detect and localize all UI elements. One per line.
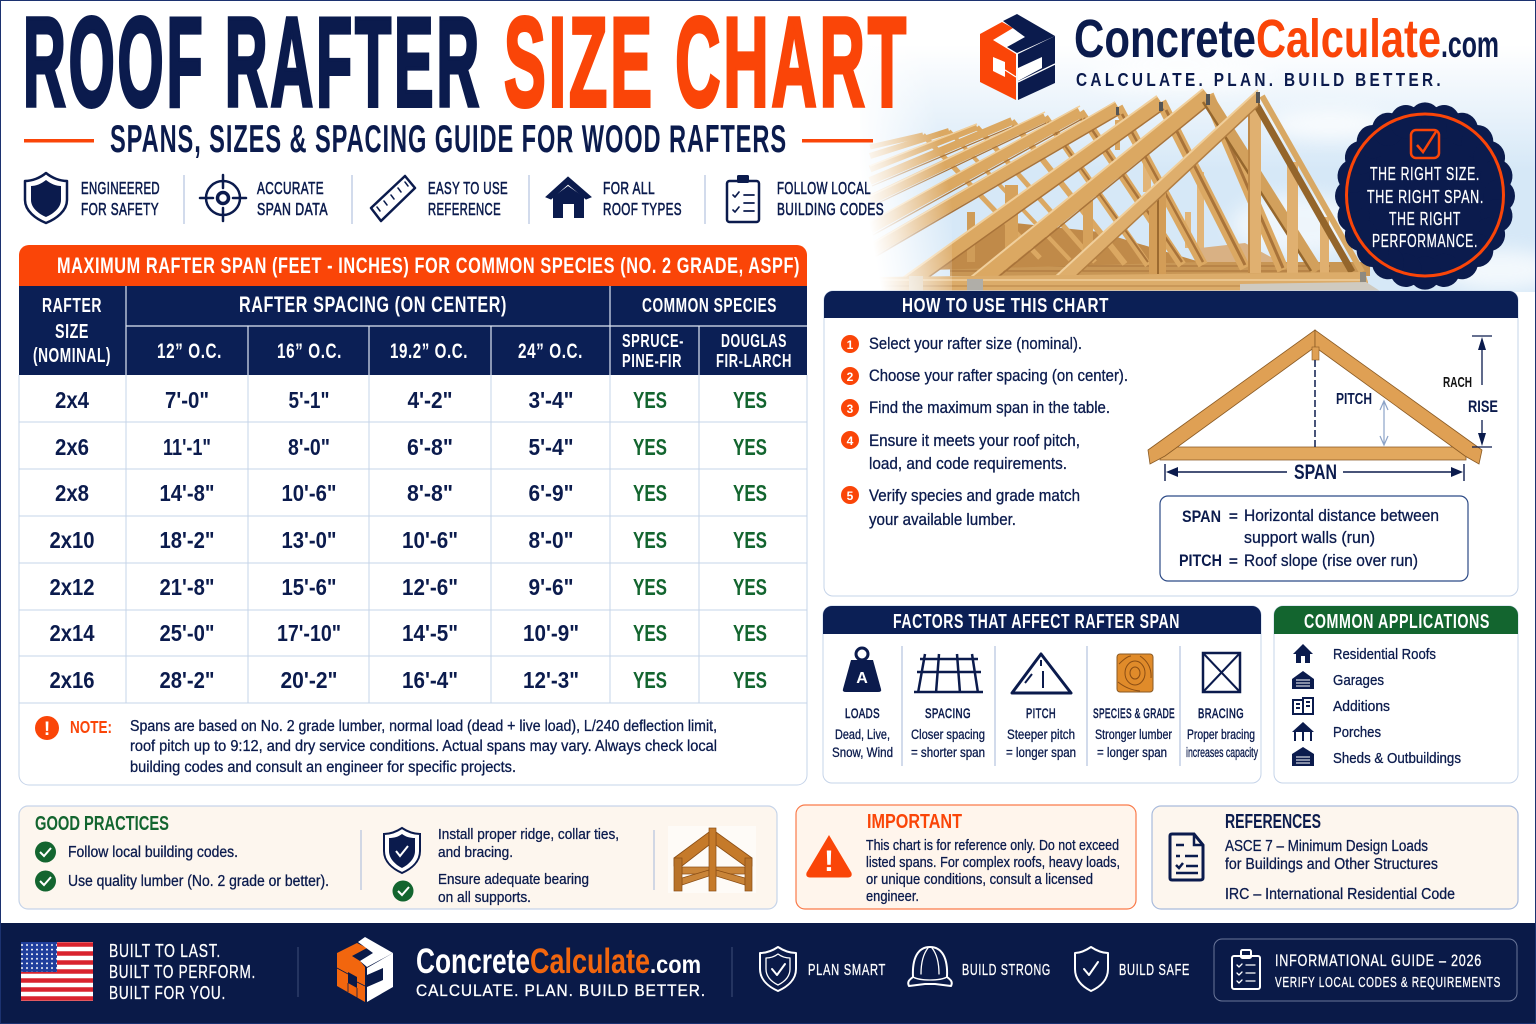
row 2x12: 15'-6" [282,574,336,600]
factor: pitch: Steeper pitch [1007,727,1075,742]
panel: factors that affect rafter span [823,606,1261,783]
build strong: BUILD STRONG [962,962,1051,979]
steps: 1 [847,338,854,352]
roof pitch diagram [1148,330,1498,484]
table header: 12” O.C. [157,340,222,363]
application: garages: Garages [1333,672,1384,689]
icon: US flag [21,942,93,1001]
roof pitch diagram: RACH [1443,374,1472,391]
steps: 4 [847,434,854,448]
panel: references: IRC – International Residential Code [1225,886,1455,903]
factor: bracing [1186,653,1258,760]
table header: 19.2” O.C. [390,340,468,363]
note: Spans are based on No. 2 grade lumber, normal load (dead + live load), L/240 deflection limit, [130,718,717,735]
application: sheds and outbuildings: Sheds & Outbuildings [1333,750,1461,767]
document icon [1170,834,1203,880]
row 2x12: 9'-6" [528,574,574,600]
application: additions [1293,698,1390,715]
feature: follow local building codes: BUILDING CODES [777,199,884,219]
footer logo: Calculate [530,942,650,981]
slogan: BUILT FOR YOU. [109,983,226,1003]
row 2x10: YES [733,527,767,553]
row 2x4: 2x4 [55,387,89,413]
application: porches: Porches [1333,724,1381,741]
row 2x12: 2x12 [50,574,94,600]
factor: pitch: PITCH [1026,705,1056,721]
row 2x4: YES [733,387,767,413]
feature: easy to use reference [371,176,508,221]
steps: 5 [847,489,854,503]
shield icon [384,828,420,873]
row 2x12 [50,574,767,600]
roof pitch diagram: RISE [1468,397,1498,416]
steps: Select your rafter size (nominal). [869,335,1082,353]
row 2x6: YES [633,434,667,460]
slogan: BUILT TO LAST. [109,941,221,961]
note: building codes and consult an engineer for specific projects. [130,759,516,776]
steps: Choose your rafter spacing (on center). [869,367,1128,385]
panel: good practices: GOOD PRACTICES [35,813,169,835]
table title bar [19,245,807,286]
badge: the right size: THE RIGHT SIZE. [1370,164,1480,184]
feature: accurate span data: ACCURATE [257,178,324,198]
steps: Ensure it meets your roof pitch, [869,432,1080,450]
note: NOTE: [70,717,112,737]
definitions box: support walls (run) [1244,529,1375,547]
table header [19,286,807,375]
panel: references: ASCE 7 – Minimum Design Loads [1225,838,1428,855]
factor: species and grade: Stronger lumber [1095,727,1172,742]
table header: SIZE [55,321,89,343]
feature: easy to use reference: REFERENCE [428,199,501,219]
roof pitch diagram: SPAN [1294,461,1337,484]
build safe: BUILD SAFE [1119,962,1190,979]
subtitle [24,118,873,161]
row 2x14: 25'-0" [160,620,214,646]
steps: 2 [847,370,854,384]
row 2x6: 6'-8" [407,434,453,460]
row 2x16: 2x16 [50,667,94,693]
factor: species and grade [1093,654,1175,760]
factor: bracing: Proper bracing [1187,727,1255,742]
steps: your available lumber. [869,511,1016,529]
factor: spacing: SPACING [925,705,971,721]
table header: 24” O.C. [518,340,583,363]
row 2x16: 12'-3" [523,667,579,693]
factor: bracing: BRACING [1198,705,1244,721]
definitions box: = [1229,508,1238,525]
panel: important: listed spans. For complex roofs, heavy loads, [866,855,1120,871]
note [35,716,717,776]
steps [841,335,1128,529]
footer band [0,923,1536,1024]
panel: how to use this chart [824,291,1518,596]
panel: good practices: and bracing. [438,844,513,861]
definitions box [1160,496,1468,581]
factor: spacing: = shorter span [911,745,985,760]
factor: species and grade: = longer span [1097,745,1167,760]
row 2x14: 10'-9" [523,620,579,646]
steps: Find the maximum span in the table. [869,399,1110,417]
row 2x10: 10'-6" [402,527,458,553]
note: ! [44,719,50,740]
roof truss photo [860,40,1536,296]
panel: good practices: Use quality lumber (No. 2 grade or better). [68,873,329,890]
row 2x4: 5'-1" [288,387,330,413]
row 2x6: 5'-4" [528,434,574,460]
table header: PINE-FIR [622,351,682,371]
row 2x8: 8'-8" [407,480,453,506]
factor: loads [832,648,893,760]
footer logo [337,937,706,1002]
definitions box: PITCH [1179,551,1222,570]
application: sheds and outbuildings [1292,747,1461,767]
steps: load, and code requirements. [869,455,1067,473]
row 2x14: 14'-5" [402,620,458,646]
definitions box: SPAN [1182,507,1221,526]
note: roof pitch up to 9:12, and dry service conditions. Actual spans may vary. Always check local [130,738,717,755]
panel: good practices: on all supports. [438,889,531,906]
panel: good practices: Follow local building codes. [68,844,238,861]
panel: important: IMPORTANT [867,811,962,833]
definitions box: = [1229,553,1238,570]
informational guide box [1214,939,1517,1001]
row 2x16: YES [733,667,767,693]
row 2x14: YES [633,620,667,646]
logo: ConcreteCalculate: .com [1441,24,1499,65]
badge: the right size: THE RIGHT SPAN. [1367,187,1484,207]
panel: important: ! [824,845,834,878]
row 2x10: 13'-0" [282,527,336,553]
row 2x6: YES [733,434,767,460]
row 2x8: 10'-6" [282,480,336,506]
footer logo: Concrete [416,942,530,981]
panel: rafter span table [19,245,807,785]
row 2x14 [50,620,767,646]
row 2x16: 16'-4" [402,667,458,693]
application: residential roofs [1293,644,1436,663]
row 2x4: 3'-4" [528,387,574,413]
table header: COMMON SPECIES [642,295,777,317]
factor: pitch: = longer span [1006,745,1076,760]
row 2x8: 14'-8" [160,480,214,506]
panel: important: or unique conditions, consult a licensed [866,872,1093,888]
row 2x12: 12'-6" [402,574,458,600]
panel: good practices: Ensure adequate bearing [438,871,589,888]
table header: RAFTER SPACING (ON CENTER) [239,292,507,317]
row 2x4: 4'-2" [408,387,452,413]
feature: engineered for safety [25,173,160,223]
logo: ConcreteCalculate: Calculate [1256,9,1441,69]
row 2x16: YES [633,667,667,693]
logo: ConcreteCalculate [980,9,1499,100]
row 2x10 [50,527,767,553]
panel: good practices: Install proper ridge, collar ties, [438,826,619,843]
panel: important [796,805,1136,909]
feature: for all roof types: ROOF TYPES [603,199,682,219]
table header: RAFTER [42,295,102,317]
row 2x12: 21'-8" [160,574,214,600]
row 2x14: 17'-10" [277,620,341,646]
panel: factors that affect rafter span: FACTORS THAT AFFECT RAFTER SPAN [893,611,1180,633]
badge: the right size: PERFORMANCE. [1372,231,1478,251]
build safe [1075,947,1190,991]
row 2x8: YES [633,480,667,506]
steps: 3 [847,402,854,416]
feature: for all roof types: FOR ALL [603,178,655,198]
row 2x4: 7'-0" [165,387,209,413]
panel: references: REFERENCES [1225,811,1321,833]
factor: loads: A [856,670,868,687]
row 2x14: YES [733,620,767,646]
factor: pitch [1006,654,1076,760]
application: porches [1292,722,1381,741]
panel: how to use this chart: HOW TO USE THIS CHART [902,295,1109,317]
row 2x4: YES [633,387,667,413]
row 2x8 [55,480,767,506]
table header: (NOMINAL) [33,345,111,367]
application: residential roofs: Residential Roofs [1333,646,1436,663]
badge: the right size: THE RIGHT [1389,209,1461,229]
row 2x8: 2x8 [55,480,89,506]
feature: follow local building codes: FOLLOW LOCAL [777,178,871,198]
row 2x16: 20'-2" [280,667,338,693]
slogan [109,941,256,1003]
subtitle: SPANS, SIZES & SPACING GUIDE FOR WOOD RAFTERS [110,118,787,161]
row 2x12: YES [633,574,667,600]
logo: ConcreteCalculate: Concrete [1074,9,1256,69]
small truss icon [668,826,756,893]
row 2x6: 8'-0" [288,434,330,460]
application: additions: Additions [1333,698,1390,715]
row 2x10: 18'-2" [160,527,214,553]
panel: references [1152,806,1518,909]
row 2x6 [55,434,767,460]
row 2x14: 2x14 [50,620,95,646]
definitions box: Roof slope (rise over run) [1244,552,1418,570]
badge: the right size [1334,101,1516,291]
factor: spacing [911,654,985,760]
plan smart: PLAN SMART [808,962,886,979]
build strong [908,947,1051,986]
definitions box: Horizontal distance between [1244,507,1439,525]
factor: bracing: increases capacity [1186,745,1258,760]
row 2x6: 11'-1" [163,434,211,460]
table header: FIR-LARCH [716,351,792,371]
feature: accurate span data [200,175,328,221]
feature: follow local building codes [727,175,884,222]
plan smart [760,947,886,991]
footer logo: CALCULATE. PLAN. BUILD BETTER. [416,981,706,1000]
feature: easy to use reference: EASY TO USE [428,178,508,198]
feature: for all roof types [546,177,682,219]
table header: 16” O.C. [277,340,342,363]
factor: spacing: Closer spacing [911,727,985,742]
logo: ConcreteCalculate: CALCULATE. PLAN. BUILD BETTER. [1076,69,1444,90]
panel: important: engineer. [866,889,919,905]
panel: common applications [1274,606,1518,783]
row 2x8: 6'-9" [528,480,574,506]
table header: DOUGLAS [721,331,787,351]
panel: good practices [19,806,777,909]
row 2x10: 2x10 [50,527,94,553]
table title bar: MAXIMUM RAFTER SPAN (FEET - INCHES) FOR COMMON SPECIES (NO. 2 GRADE, ASPF) [57,253,800,278]
row 2x8: YES [733,480,767,506]
row 2x10: 8'-0" [528,527,574,553]
factor: loads: LOADS [845,705,880,721]
footer logo: .com [650,951,701,979]
factor: species and grade: SPECIES & GRADE [1093,705,1175,721]
feature: engineered for safety: ENGINEERED [81,178,160,198]
factor: loads: Dead, Live, [835,727,890,742]
row 2x4 [55,387,767,413]
row 2x10: YES [633,527,667,553]
feature: accurate span data: SPAN DATA [257,199,328,219]
feature: engineered for safety: FOR SAFETY [81,199,159,219]
roof pitch diagram: PITCH [1336,391,1372,408]
application: garages [1292,671,1384,689]
steps: Verify species and grade match [869,487,1080,505]
table header: SPRUCE- [622,331,684,351]
row 2x6: 2x6 [55,434,89,460]
factor: loads: Snow, Wind [832,745,893,760]
row 2x16 [50,667,767,693]
row 2x16: 28'-2" [160,667,214,693]
slogan: BUILT TO PERFORM. [109,962,256,982]
panel: important: This chart is for reference only. Do not exceed [866,838,1119,854]
panel: references: for Buildings and Other Structures [1225,856,1438,873]
row 2x12: YES [733,574,767,600]
